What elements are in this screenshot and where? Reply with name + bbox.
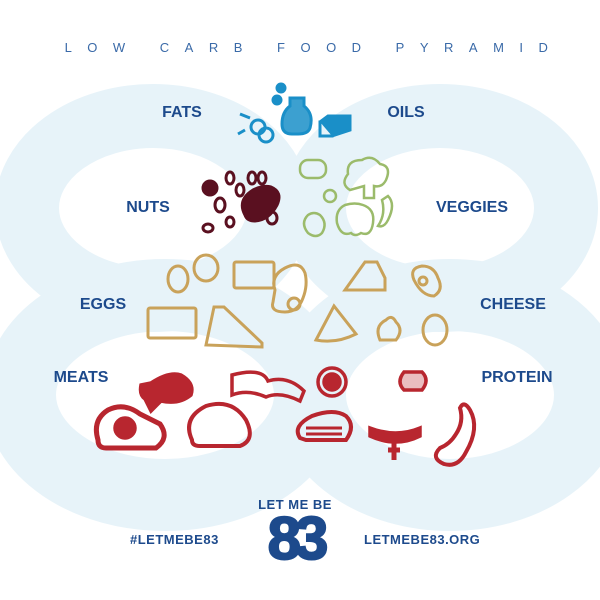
icon group: nuts <box>203 172 279 232</box>
logo: 83 <box>268 505 322 572</box>
logo: LET ME BE <box>258 497 332 512</box>
label: fats: FATS <box>162 104 202 121</box>
icon group: eggs and cheese <box>148 255 447 347</box>
label: eggs: EGGS <box>80 296 126 313</box>
label: protein: PROTEIN <box>481 369 553 386</box>
label: oils: OILS <box>387 104 425 121</box>
footer url: LETMEBE83.ORG <box>364 532 480 547</box>
icon group: fats <box>238 84 350 142</box>
label: nuts: NUTS <box>126 199 170 216</box>
label: cheese: CHEESE <box>480 296 546 313</box>
footer hashtag: #LETMEBE83 <box>130 532 219 547</box>
icon group: veggies <box>300 158 392 236</box>
label: meats: MEATS <box>54 369 108 386</box>
label: veggies: VEGGIES <box>436 199 508 216</box>
title: LOW CARB FOOD PYRAMID <box>65 40 563 55</box>
icon group: meats <box>96 368 474 465</box>
logo <box>258 497 332 572</box>
